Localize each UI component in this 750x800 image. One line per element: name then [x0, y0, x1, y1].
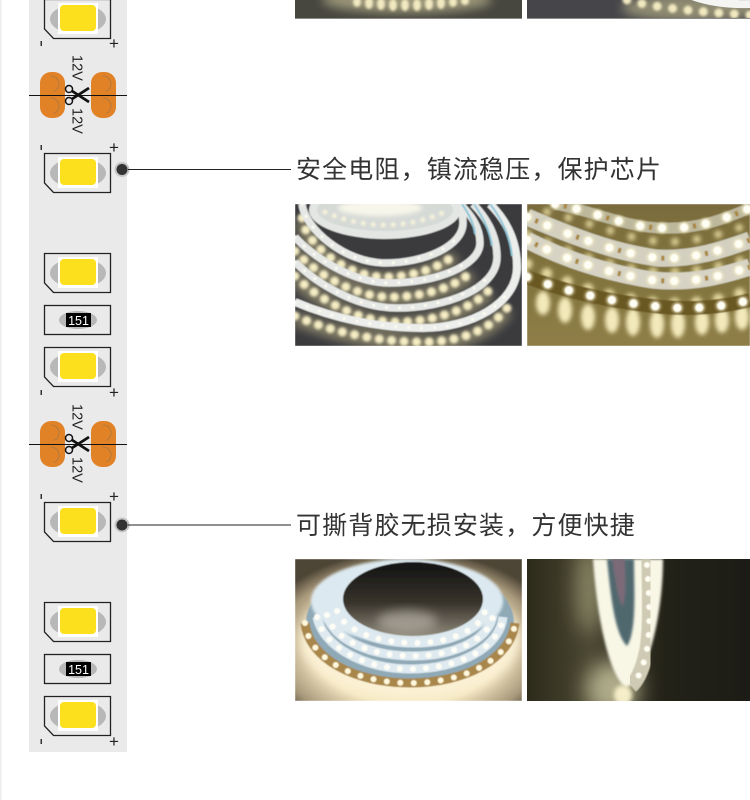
dark centre: [343, 562, 483, 636]
LED chip: third: [44, 254, 110, 292]
bead glow: [527, 204, 750, 308]
light glow: [577, 544, 638, 717]
elongated reflections: [536, 291, 749, 338]
brown outer bead row: [305, 623, 515, 683]
resistor: second: [44, 654, 110, 684]
photo: top left strip fragment: [295, 0, 522, 19]
polarity marks: fifth: [40, 732, 119, 751]
inner bead rows: [317, 611, 503, 669]
resistor: second: 151: [68, 663, 89, 677]
bead highlights: [295, 204, 507, 328]
reflections glow: [295, 220, 507, 344]
photo: top right strip fragment: [527, 0, 750, 19]
photo: coil seen edge-on: [527, 559, 750, 701]
polarity marks: fourth: [40, 487, 119, 506]
cut point: second: [29, 404, 127, 483]
glow around coil: [300, 579, 520, 699]
polarity marks: fourth: +: [109, 487, 119, 506]
photo: close-up of lit strips: [527, 204, 750, 346]
inner strip rows: [317, 611, 503, 669]
pale reflection streaks: [377, 610, 437, 632]
reflections between strips: [527, 212, 750, 303]
strip beads: [631, 559, 650, 686]
photo: full coil with dark centre: [295, 559, 522, 701]
resistor: first: [44, 306, 110, 334]
strip beads: [527, 204, 750, 308]
photo: coiled strip on dark surface: [295, 204, 522, 346]
coil body: [306, 561, 514, 685]
callout dot: [114, 162, 130, 177]
LED chip: top: [44, 0, 110, 38]
cut point: second: 12V: [68, 404, 84, 430]
strip bands: [527, 204, 750, 308]
cut point: first: 12V: [68, 108, 84, 134]
blue strip edges: [462, 204, 512, 256]
coil ring: [593, 559, 663, 687]
bead highlights: [631, 565, 649, 686]
polarity marks: third: +: [109, 383, 119, 402]
callout text: 安全电阻，镇流稳压，保护芯片: [296, 156, 662, 184]
LED chip: seventh: [44, 696, 110, 736]
polarity marks: top: [40, 34, 119, 53]
callout text: 可撕背胶无损安装，方便快捷: [296, 512, 636, 540]
resistor: first: 151: [68, 314, 89, 328]
reflective inner surface: [607, 559, 634, 646]
callout: peel-off adhesive: [114, 512, 636, 540]
polarity marks: second: +: [109, 138, 119, 157]
LED chip: sixth: [44, 602, 110, 642]
cut point: first: [29, 55, 127, 134]
cut point: first: 12V: [68, 55, 84, 81]
panel: LED strip board: [29, 0, 127, 752]
lower glow: [614, 685, 632, 705]
solder marks: [527, 204, 750, 281]
LED chip: fifth: [44, 502, 110, 542]
LED chip: second: [44, 154, 110, 192]
callout: safety resistor: [114, 156, 662, 184]
polarity marks: second: [40, 138, 119, 157]
callout dot: [114, 518, 130, 532]
inner coil: [309, 181, 461, 239]
white strip bands: [295, 204, 517, 328]
polarity marks: top: +: [109, 34, 119, 53]
polarity marks: third: [40, 383, 119, 402]
polarity marks: fifth: +: [109, 732, 119, 751]
bead reflections: [295, 218, 507, 342]
LED chip: fourth: [44, 348, 110, 386]
page edge line: [0, 0, 2, 800]
cut point: second: 12V: [68, 457, 84, 483]
